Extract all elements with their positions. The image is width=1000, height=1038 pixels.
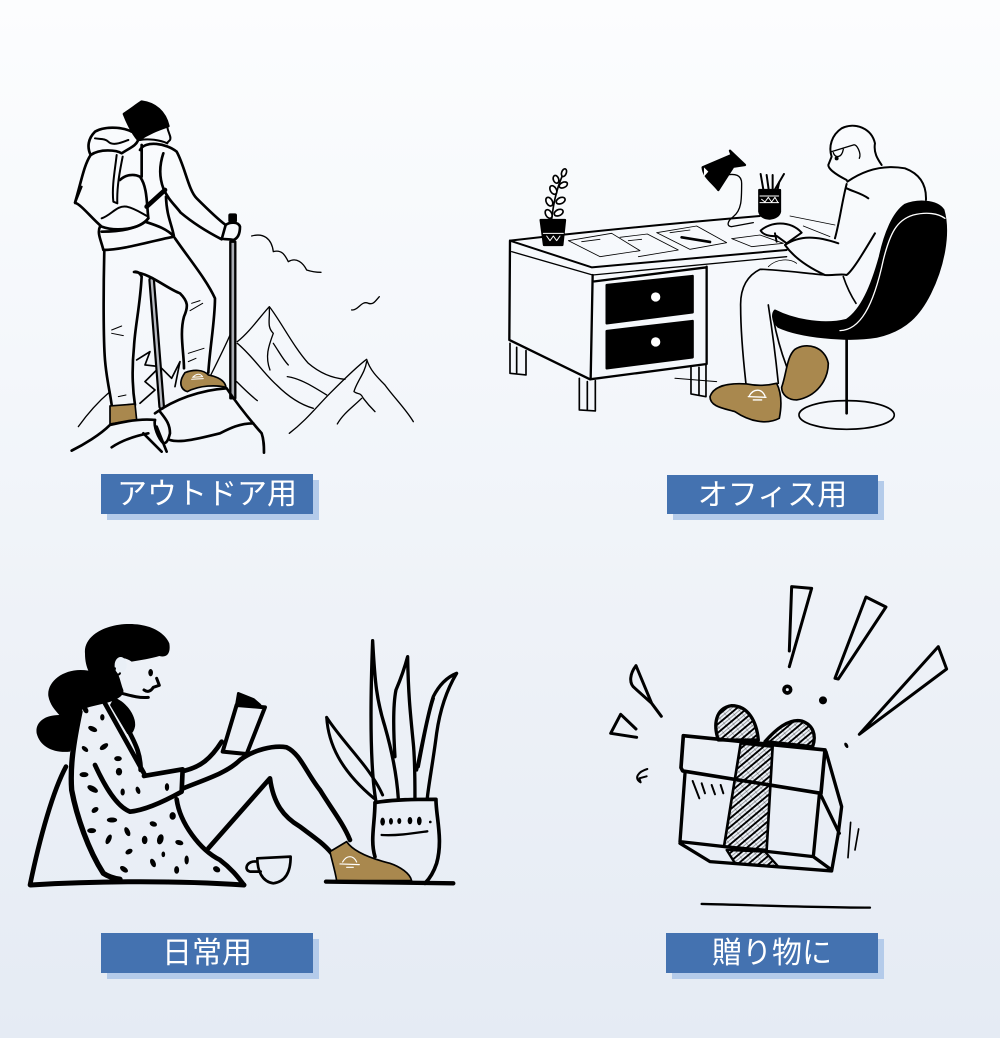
boot right	[181, 370, 226, 392]
backrest	[30, 767, 66, 885]
box lid	[681, 736, 825, 793]
shoe front	[710, 383, 781, 422]
dots	[784, 686, 791, 693]
papers on desk	[568, 216, 835, 257]
trekking poles	[230, 242, 235, 398]
chair	[773, 202, 946, 339]
plant	[541, 220, 565, 245]
pot	[373, 799, 439, 883]
label: daily use: 日常用	[162, 937, 252, 970]
motion lines	[848, 822, 859, 858]
hair	[36, 624, 170, 752]
hiker jacket and arm	[140, 144, 226, 239]
backpack	[75, 128, 148, 229]
plant	[371, 641, 457, 802]
label: gift: 贈り物に	[712, 937, 832, 970]
hat	[124, 102, 168, 140]
illustration: hiker on mountain	[72, 102, 413, 453]
cup	[247, 857, 291, 883]
label: daily use	[101, 933, 319, 979]
label: outdoor: アウトドア用	[117, 478, 297, 511]
floor line	[31, 882, 244, 885]
rock and foreground	[72, 388, 264, 453]
label: office	[667, 475, 884, 520]
dress spots	[80, 706, 221, 873]
shoe	[330, 842, 412, 881]
illustration: man at office desk	[509, 126, 946, 429]
label: outdoor	[101, 474, 319, 520]
pencil pot	[759, 190, 780, 219]
bow	[716, 706, 758, 740]
book	[223, 705, 265, 754]
label: gift	[666, 933, 884, 979]
label: office: オフィス用	[698, 479, 847, 512]
drawers	[607, 276, 693, 323]
ground line	[702, 904, 870, 908]
ground line	[326, 882, 453, 883]
desk	[510, 216, 787, 267]
arms and legs	[185, 742, 222, 771]
mountains	[78, 235, 413, 433]
gloved hand	[222, 223, 240, 240]
illustration: woman reading	[30, 624, 457, 885]
lamp	[703, 151, 745, 190]
boot left	[110, 404, 137, 424]
box body	[680, 752, 842, 871]
dress	[71, 712, 120, 879]
hiker trousers	[104, 238, 215, 405]
man	[828, 126, 882, 180]
ribbon	[724, 743, 773, 850]
face	[122, 678, 159, 698]
exclamation rays	[789, 587, 812, 667]
shoe back	[782, 346, 828, 400]
illustration: gift box	[611, 587, 947, 908]
ear	[115, 657, 127, 673]
